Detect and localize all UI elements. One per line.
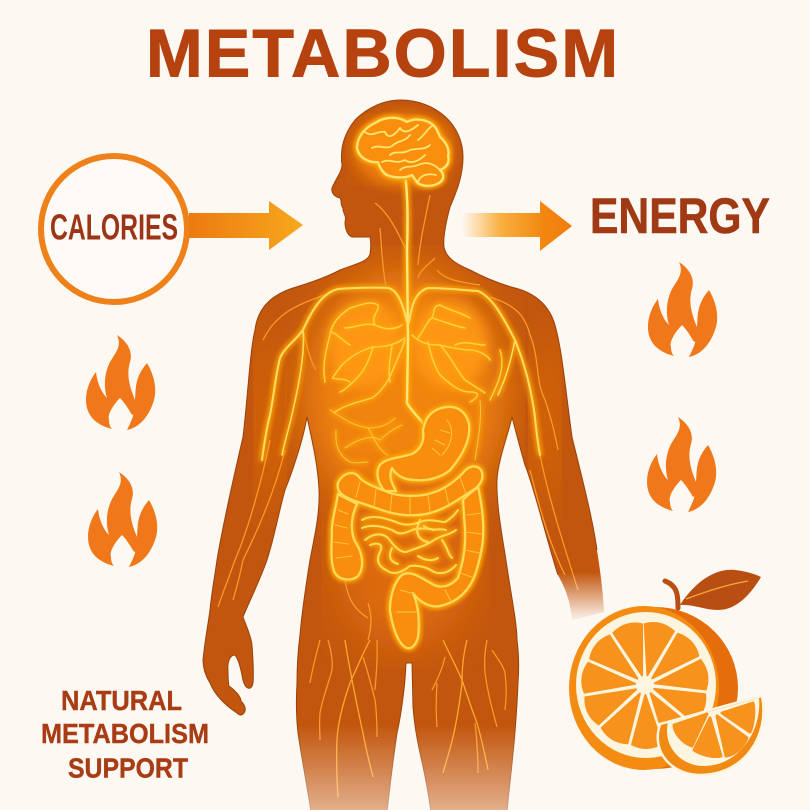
- natural metabolism support label: NATURAL: [61, 685, 182, 716]
- leg and torso veins: [218, 195, 578, 797]
- calories input circle: [41, 156, 187, 302]
- calories label: CALORIES: [50, 206, 178, 248]
- orange segments: [581, 620, 710, 748]
- flame right top: [648, 262, 717, 357]
- ascending colon: [331, 494, 362, 579]
- orange slice wedge: [658, 696, 763, 775]
- right collar and arm nerve: [409, 288, 540, 455]
- bottom fade of legs: [295, 725, 520, 810]
- orange fruit group: [569, 570, 763, 775]
- leaf and stem: [665, 570, 761, 610]
- orange rind face: [569, 606, 719, 770]
- liver branches: [330, 400, 481, 463]
- brain: [357, 118, 449, 186]
- digestive system: [331, 407, 483, 648]
- right lung branches: [412, 305, 502, 402]
- descending colon and rectum: [390, 487, 483, 648]
- left lung branches: [324, 303, 405, 412]
- transverse colon: [338, 466, 482, 515]
- natural metabolism support label: METABOLISM: [41, 718, 209, 749]
- body outline: [203, 100, 597, 810]
- small intestine: [362, 510, 458, 573]
- flame right bottom: [647, 417, 716, 512]
- body silhouette: [190, 90, 620, 810]
- stomach: [378, 407, 469, 491]
- glowing nerves and lungs: [262, 175, 540, 463]
- orange body: [572, 607, 738, 769]
- energy label: ENERGY: [590, 188, 770, 244]
- spinal cord: [405, 175, 424, 425]
- natural metabolism support label: SUPPORT: [68, 752, 188, 784]
- flame left top: [86, 335, 155, 430]
- arrow: body to energy: [462, 201, 572, 251]
- arrow: calories to body: [189, 201, 303, 250]
- title: METABOLISM: [146, 16, 618, 92]
- flame left bottom: [88, 472, 157, 567]
- left collar and arm nerve: [262, 288, 407, 460]
- human body figure: [190, 90, 620, 810]
- orange pith: [576, 612, 716, 758]
- natural metabolism support label: [41, 685, 209, 784]
- fade of right hand: [555, 572, 615, 624]
